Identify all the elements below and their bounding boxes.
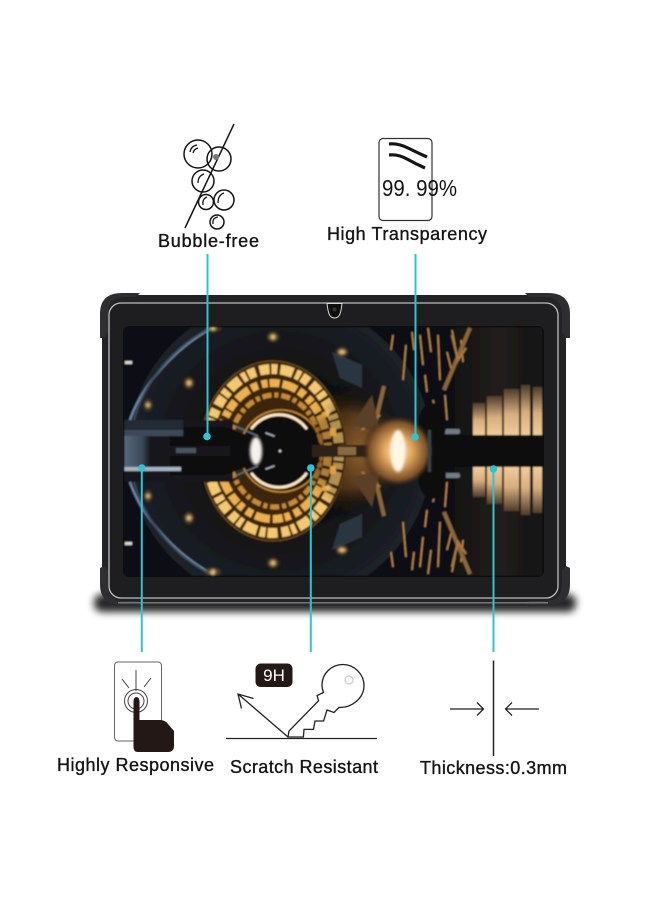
golden shards <box>352 328 470 574</box>
9H badge <box>256 664 292 687</box>
tablet shadow <box>94 594 576 612</box>
label: high transparency: High Transparency <box>327 224 487 244</box>
icon: bubbles <box>184 124 234 229</box>
thickness pointer <box>490 465 497 652</box>
icon: touch finger <box>114 662 174 752</box>
9H badge: 9H <box>263 666 285 685</box>
screen artwork <box>123 326 544 577</box>
label: thickness: Thickness:0.3mm <box>420 758 567 778</box>
label: highly responsive: Highly Responsive <box>57 755 214 775</box>
transparency pointer <box>411 254 419 441</box>
label: bubble-free: Bubble-free <box>158 231 259 251</box>
scratch pointer <box>307 464 315 652</box>
right glowing disk <box>362 415 434 487</box>
callout lines <box>138 254 497 652</box>
glass panel <box>109 303 558 598</box>
dark hub <box>418 403 446 447</box>
right wall <box>425 326 544 577</box>
icon: thickness <box>450 660 539 756</box>
warm glow between rings <box>332 390 390 512</box>
tablet body <box>102 295 566 603</box>
center bright arcs <box>252 415 306 487</box>
camera notch <box>327 304 342 318</box>
orange ring <box>200 361 378 541</box>
responsive pointer <box>138 464 146 652</box>
label: scratch resistant: Scratch Resistant <box>230 757 378 777</box>
tablet with screen <box>94 293 576 612</box>
bubble-free pointer <box>203 254 211 440</box>
left arm <box>123 361 281 545</box>
icon: transparency <box>379 138 457 220</box>
lamps <box>144 324 348 576</box>
icon: scratch key <box>226 664 377 738</box>
edge vignette <box>123 326 544 577</box>
transparency value: 99. 99% <box>382 175 457 201</box>
corner bumpers <box>100 293 570 605</box>
left disc <box>128 326 434 577</box>
